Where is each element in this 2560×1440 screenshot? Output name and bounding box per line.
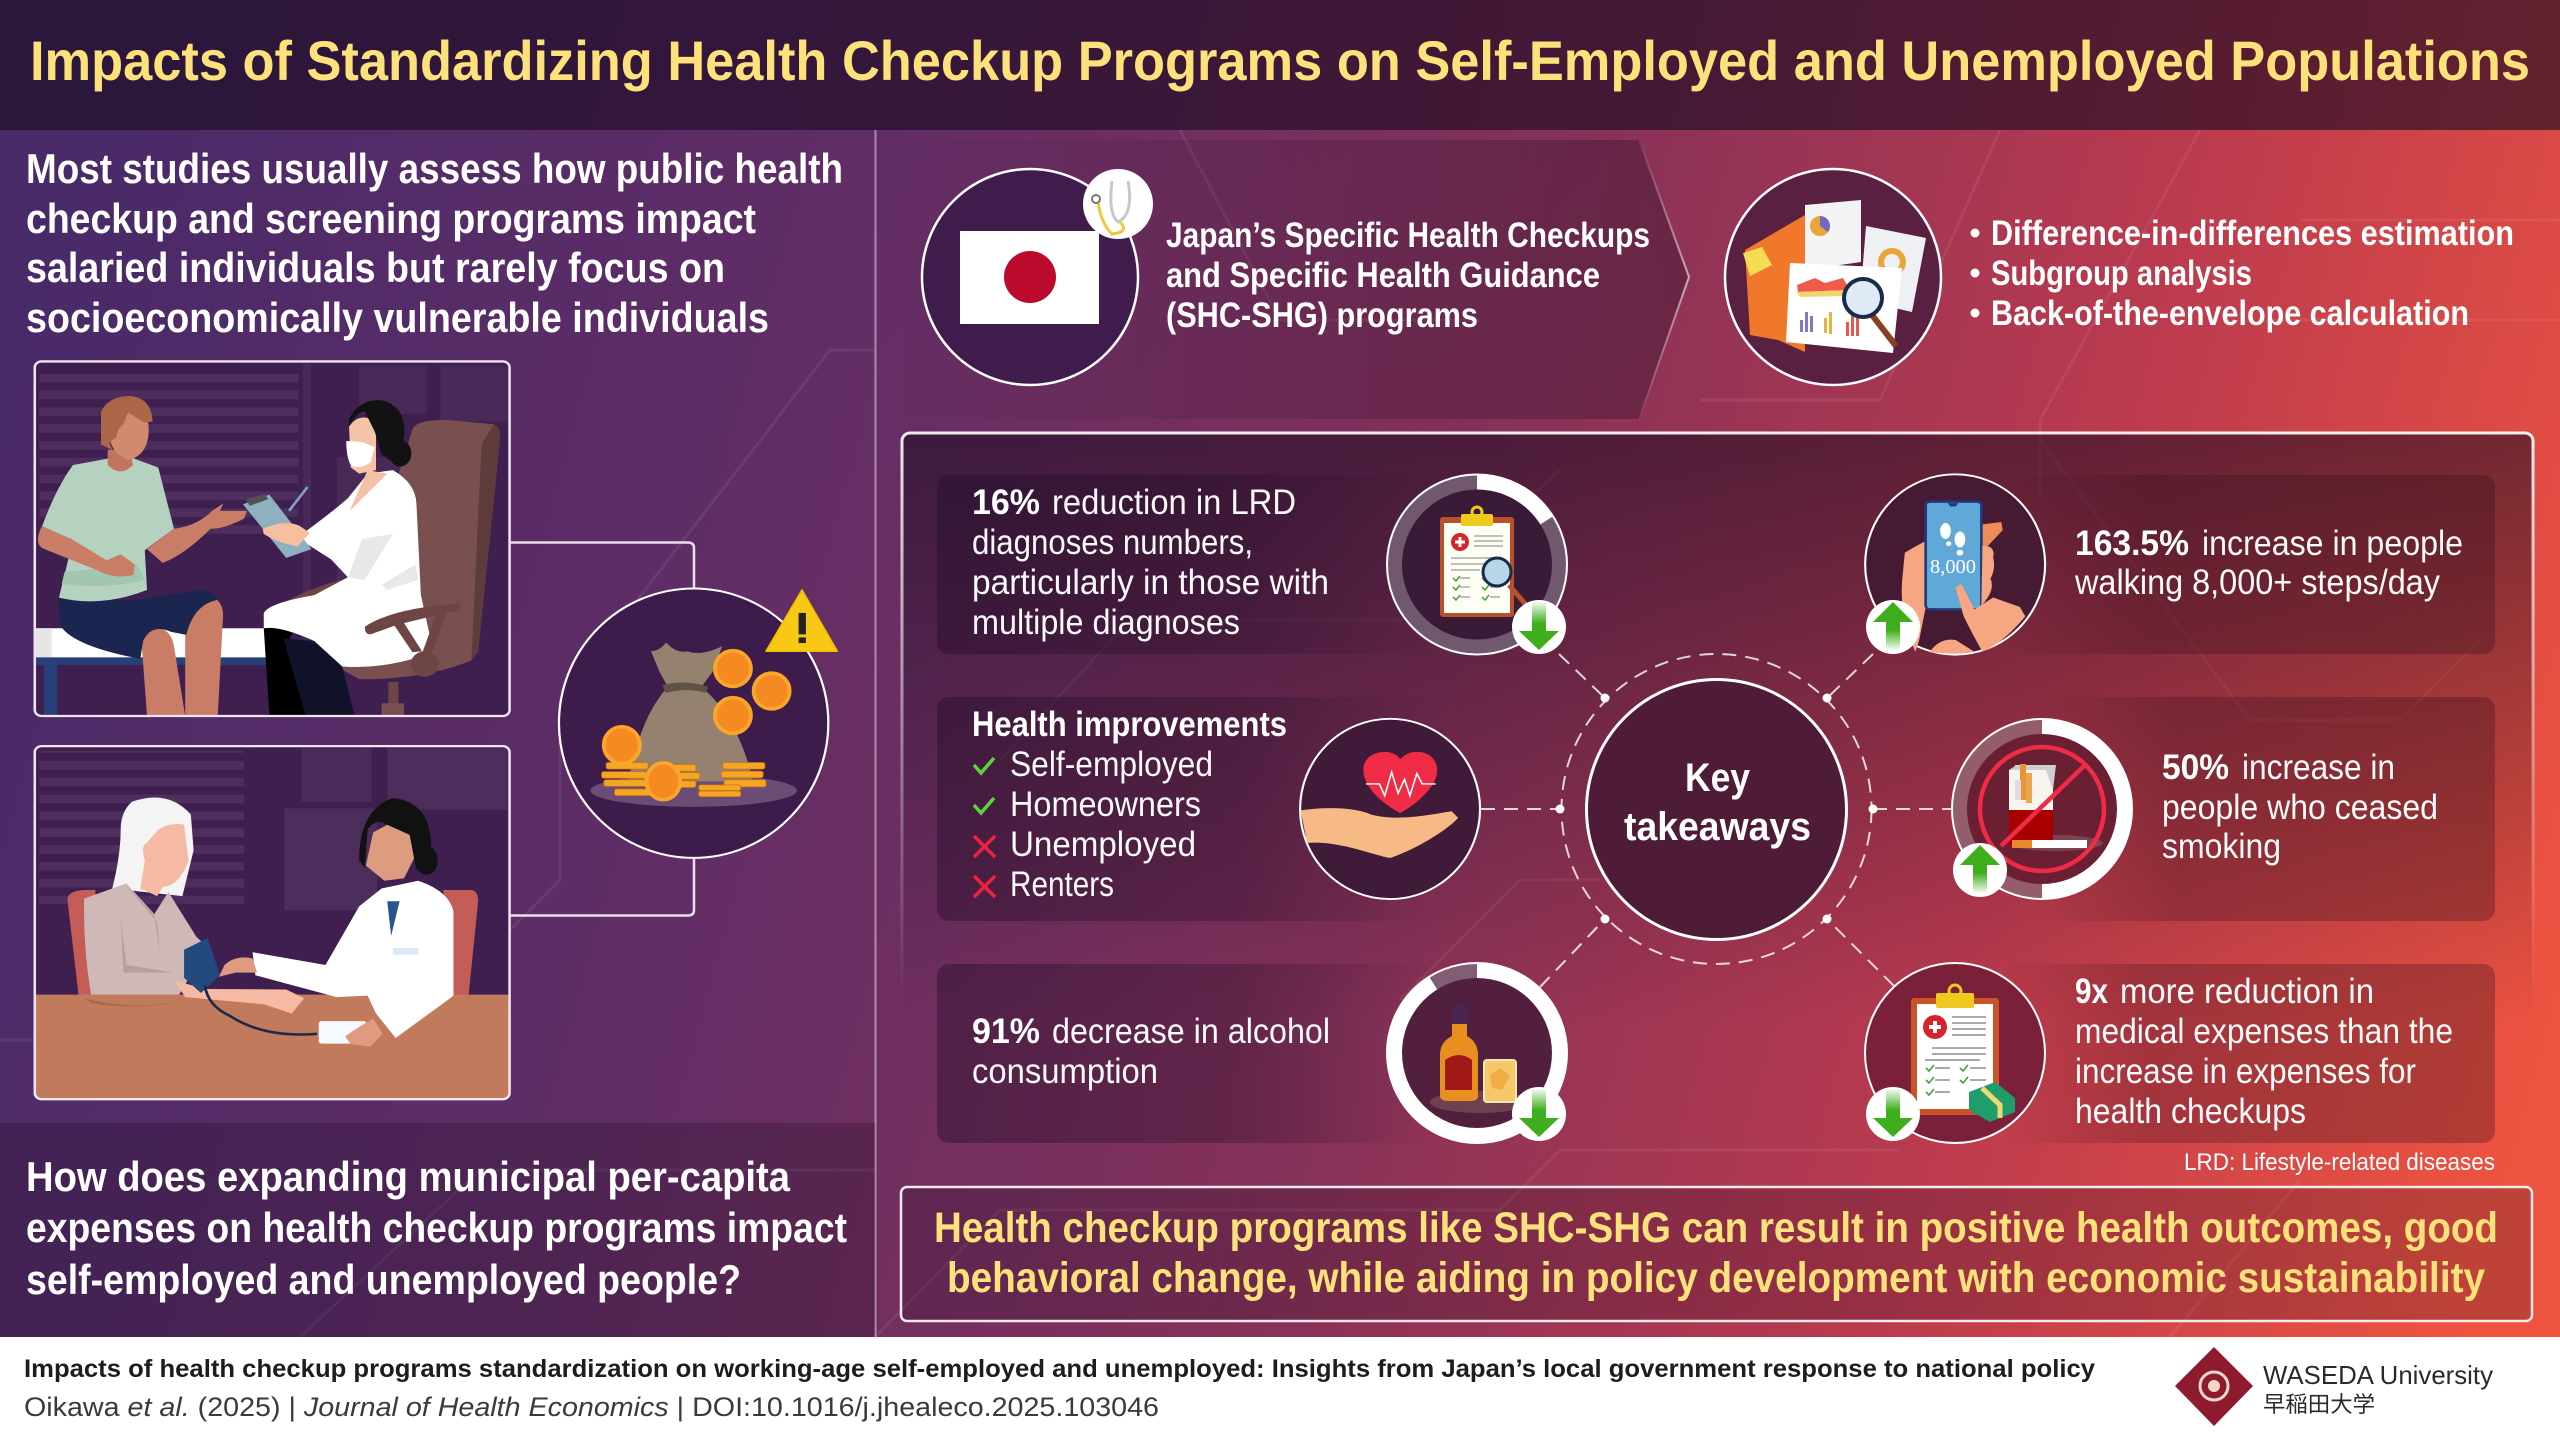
text: medical expenses: 9x [2075,972,2108,1011]
text: smoking [2162,748,2438,866]
intro text: socioeconomically vulnerable individuals [26,294,769,341]
phone count label: 8,000 [1930,556,1976,578]
patient [112,797,194,896]
table [35,995,510,1099]
card backgrounds [937,475,2495,1143]
icon: clipboard ring 16% [1387,474,1567,654]
illustration: doctor consulting a patient [35,361,510,716]
logo: Waseda University: WASEDA University [2263,1360,2493,1390]
callout: conclusion [901,1187,2532,1321]
connector dashes [1481,654,1951,987]
footer [0,1337,2560,1440]
icon: down arrow badge [1512,600,1566,654]
text: LRD reduction: 16% [972,483,1040,522]
icon: analysis documents [1725,169,1941,385]
icon: down arrow badge [1512,1087,1566,1141]
methods list: Subgroup analysis [1991,254,2252,293]
intro text [26,145,843,341]
chair [337,420,500,679]
text: smoking: 50% [2162,748,2229,787]
panel: key takeaways [902,433,2533,1193]
text: health improvements: Renters [1010,865,1114,904]
text: medical expenses: increase in expenses for [2075,1052,2416,1091]
text: LRD reduction [972,483,1329,642]
logo: Waseda University: 早稲田大学 [2263,1392,2375,1417]
left panel [0,130,876,1337]
icon: down arrow badge [1866,1087,1920,1141]
intro text: checkup and screening programs impact [26,195,756,242]
text: alcohol [972,1012,1330,1091]
program text: Japan’s Specific Health Checkups [1166,216,1650,255]
man [141,628,185,716]
question band: expenses on health checkup programs impact [26,1204,847,1251]
footnote: LRD: Lifestyle-related diseases [2184,1149,2495,1176]
methods list: Back-of-the-envelope calculation [1991,294,2469,333]
methods list [1970,214,2514,333]
intro text: salaried individuals but rarely focus on [26,244,725,291]
bed [35,628,270,658]
citation details: Oikawa et al. (2025) | Journal of Health Economics | DOI:10.1016/j.jhealeco.2025.103046 [24,1392,1159,1422]
text: smoking: increase in [2242,748,2395,787]
text: health improvements: Self-employed [1010,745,1213,784]
text: smoking: smoking [2162,827,2281,866]
icon: heart on hand [1300,719,1480,899]
program text: and Specific Health Guidance [1166,256,1600,295]
central circle: key takeaways: Key [1685,756,1751,800]
text: medical expenses: medical expenses than the [2075,1012,2453,1051]
program text [1166,216,1650,335]
text: health improvements: Health improvements [972,705,1287,744]
citation title: Impacts of health checkup programs standardization on working-age self-employed and unemployed: Insights from Japan’s local government response to national policy [24,1355,2095,1383]
central circle: key takeaways [1586,680,1846,940]
text: health improvements: Unemployed [1010,825,1196,864]
text: alcohol: consumption [972,1052,1158,1091]
icon: phone steps [1865,474,2045,655]
icon: Japan flag [922,169,1138,385]
text: LRD reduction: multiple diagnoses [972,603,1240,642]
connector lines [510,542,694,916]
text: LRD reduction: reduction in LRD [1052,483,1296,522]
icon: up arrow badge [1953,843,2007,897]
header band [0,0,2560,130]
text: health improvements [972,705,1287,904]
text: medical expenses: more reduction in [2120,972,2374,1011]
icon: money bag with warning [559,588,837,858]
logo: Waseda University [2175,1347,2493,1426]
central circle: key takeaways: takeaways [1624,805,1811,849]
text: smoking: people who ceased [2162,788,2438,827]
intro text: Most studies usually assess how public health [26,145,843,192]
text: walking: 163.5% [2075,524,2189,563]
text: LRD reduction: particularly in those with [972,563,1329,602]
text: medical expenses: health checkups [2075,1092,2306,1131]
icon: medical expense clipboard [1865,963,2045,1143]
program text: (SHC-SHG) programs [1166,296,1478,335]
chairs [67,890,95,996]
icon: no smoking ring 50% [1952,719,2132,899]
chair arm [365,603,461,652]
text: medical expenses [2075,972,2453,1131]
text: LRD reduction: diagnoses numbers, [972,523,1253,562]
text: walking: increase in people [2202,524,2463,563]
text: health improvements: Homeowners [1010,785,1201,824]
question band: self-employed and unemployed people? [26,1256,741,1303]
icon: stethoscope [1083,169,1153,239]
text: walking [2074,524,2463,602]
divider line [874,130,876,1337]
icon: alcohol ring 91% [1387,963,1567,1143]
icon: up arrow badge [1866,600,1920,654]
question band: How does expanding municipal per-capita [26,1153,791,1200]
text: alcohol: 91% [972,1012,1040,1051]
illustration: doctor measuring blood pressure [35,746,510,1099]
chevron band: program [880,140,1689,419]
question band [0,1123,875,1337]
arm and cuff [174,980,304,1013]
doctor [264,622,306,716]
text: walking: walking 8,000+ steps/day [2074,563,2440,602]
text: alcohol: decrease in alcohol [1052,1012,1330,1051]
doctor [253,881,453,1038]
